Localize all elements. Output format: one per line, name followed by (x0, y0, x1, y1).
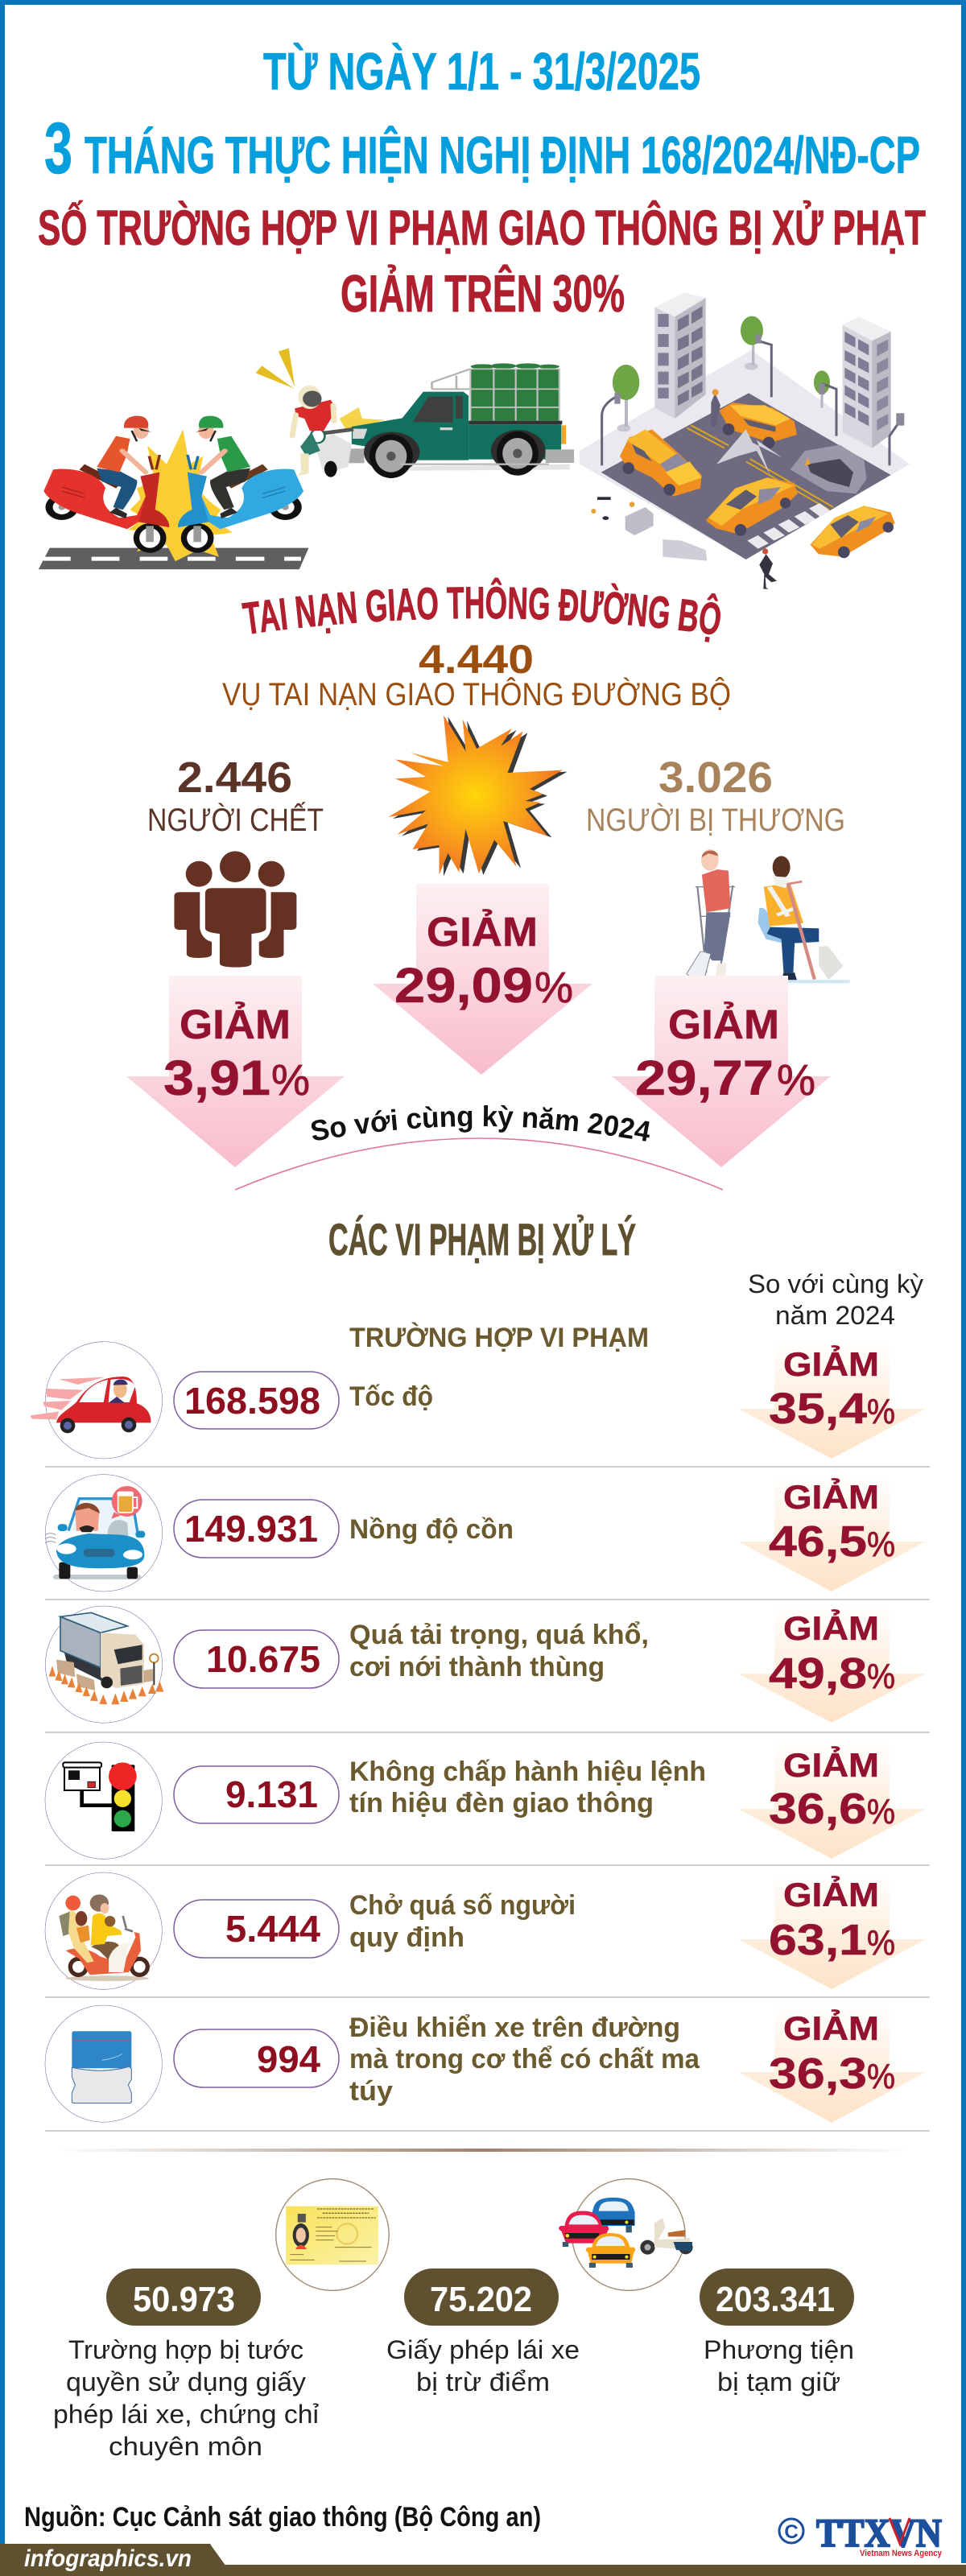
arrow: down percent: 35,4 (769, 1385, 867, 1433)
footer bar (0, 2544, 966, 2576)
stat: licence points deducted (386, 2268, 580, 2396)
stat: injured: NGƯỜI BỊ THƯƠNG (586, 802, 845, 838)
arrow: down percent (738, 2005, 926, 2123)
stat: vehicles impounded: Phương tiện (704, 2335, 854, 2364)
arc under caption (235, 1138, 723, 1190)
stat: deaths (147, 753, 324, 838)
arrow: down percent: % (867, 1923, 895, 1963)
column note: compared with 2024 (748, 1269, 923, 1330)
number pill (174, 1500, 339, 1558)
logo: TTXVN: TTXVN (816, 2510, 942, 2555)
row: alcohol (45, 1475, 926, 1591)
caption: compared with 2024: So với cùng kỳ năm 2024 (311, 1104, 650, 1141)
label: Quá tải trọng, quá khổ, (349, 1620, 649, 1650)
logo: TTXVN (779, 2510, 943, 2558)
label: cơi nới thành thùng (349, 1652, 605, 1682)
icon: drunk driver blue car (45, 1475, 163, 1591)
arrow: down percent: GIẢM (783, 1745, 879, 1784)
arrow: down percent (738, 1606, 926, 1723)
arrow: down percent: GIẢM (783, 1344, 879, 1383)
number pill: 5.444 (225, 1908, 320, 1950)
illustration: truck hitting motorbike (256, 349, 574, 478)
illustration: two scooters colliding (39, 416, 308, 569)
source line: Nguồn: Cục Cảnh sát giao thông (Bộ Công an) (24, 2502, 541, 2533)
label: mà trong cơ thể có chất ma (349, 2044, 700, 2074)
column note: compared with 2024: So với cùng kỳ (748, 1269, 923, 1298)
footer bar: infographics.vn (24, 2545, 192, 2572)
stat: licences revoked (53, 2268, 319, 2461)
column note: compared with 2024: năm 2024 (775, 1301, 895, 1330)
icon: speeding red car (30, 1342, 163, 1459)
label: quy định (349, 1922, 464, 1953)
stat: licences revoked: phép lái xe, chứng chỉ (53, 2400, 319, 2429)
stat: licence points deducted: Giấy phép lái xe (386, 2335, 580, 2364)
arrow: accidents change: GIẢM (427, 908, 538, 955)
stat: total accidents: 4.440 (419, 637, 534, 682)
icon: traffic light with camera (45, 1742, 162, 1859)
icon: impounded vehicles (559, 2179, 693, 2290)
arrow: deaths change: 3,91 (163, 1051, 270, 1105)
column heading: violation cases: TRƯỜNG HỢP VI PHẠM (349, 1323, 649, 1353)
arrow: accidents change: 29,09 (394, 958, 533, 1013)
arrow: down percent: % (867, 1792, 895, 1831)
icon: family on a scooter (45, 1872, 162, 1989)
stat: licences revoked: quyền sử dụng giấy (66, 2368, 306, 2396)
label: tín hiệu đèn giao thông (349, 1788, 654, 1818)
label (349, 1890, 576, 1953)
arrow: deaths change: % (271, 1056, 310, 1104)
label: Chở quá số người (349, 1890, 576, 1921)
label: Điều khiển xe trên đường (349, 2013, 680, 2043)
arrow: down percent: 63,1 (769, 1916, 867, 1964)
arrow: down percent: 49,8 (769, 1649, 867, 1698)
icon: group of people (174, 851, 296, 968)
logo: TTXVN: C (784, 2521, 799, 2543)
stat: total accidents (222, 637, 731, 712)
arrow: injured change: % (777, 1056, 815, 1104)
label (349, 2013, 700, 2107)
arrow: accidents change (373, 884, 592, 1075)
arrow: accidents change: % (535, 964, 573, 1012)
label: túy (349, 2076, 393, 2107)
stat: injured (586, 753, 845, 838)
label: Nồng độ cồn (349, 1514, 514, 1545)
section: road accidents (126, 578, 850, 1191)
arrow: down percent: GIẢM (783, 1875, 879, 1913)
arrow: down percent: 36,6 (769, 1785, 867, 1833)
stat: vehicles impounded: 203.341 (716, 2280, 835, 2319)
label (349, 1620, 649, 1682)
stat: deaths: 2.446 (177, 753, 292, 802)
stat: vehicles impounded: bị tạm giữ (717, 2368, 840, 2396)
stat: injured: 3.026 (658, 753, 773, 802)
title block (38, 42, 926, 323)
label: Không chấp hành hiệu lệnh (349, 1757, 706, 1787)
row: drugs (45, 2005, 926, 2123)
arrow: injured change: 29,77 (635, 1051, 774, 1105)
arrow: down percent: 36,3 (769, 2050, 867, 2098)
row: speeding (30, 1341, 926, 1459)
number pill (174, 1900, 339, 1958)
arrow: down percent: % (867, 2057, 895, 2096)
arrow: down percent (738, 1475, 926, 1591)
arrow: down percent: % (867, 1525, 895, 1564)
icon: injured people with crutches (687, 849, 850, 983)
number pill: 994 (257, 2038, 320, 2080)
arrow: injured change: GIẢM (668, 1001, 779, 1047)
title: numeral 3: 3 (44, 109, 72, 189)
stat: vehicles impounded (700, 2268, 854, 2396)
title: reduction line: GIẢM TRÊN 30% (341, 264, 625, 323)
heading: arched road accidents title: TAI NẠN GIAO THÔNG ĐƯỜNG BỘ (242, 578, 720, 642)
stat: licence points deducted: bị trừ điểm (416, 2368, 550, 2396)
row: overload (45, 1606, 926, 1723)
number pill: 168.598 (184, 1380, 320, 1422)
arrow: down percent: GIẢM (783, 2008, 879, 2047)
section heading: violations handled: CÁC VI PHẠM BỊ XỬ LÝ (328, 1214, 636, 1265)
arrow: down percent: % (867, 1657, 895, 1696)
stat: deaths: NGƯỜI CHẾT (147, 801, 324, 838)
stat: licences revoked: chuyên môn (109, 2432, 262, 2461)
arrow: down percent: GIẢM (783, 1608, 879, 1647)
stat: licence points deducted: 75.202 (430, 2280, 532, 2319)
icon: drug bag (45, 2005, 162, 2122)
illustration: isometric city crash scene (580, 292, 910, 589)
arrow: down percent: GIẢM (783, 1477, 879, 1516)
number pill: 10.675 (206, 1638, 320, 1680)
logo: TTXVN: Vietnam News Agency (860, 2549, 943, 2558)
number pill (174, 1372, 339, 1429)
icon: overloaded truck with cones (45, 1606, 163, 1723)
number pill (174, 2029, 339, 2087)
arrow: down percent (738, 1341, 926, 1459)
row: too many passengers (45, 1872, 926, 1989)
number pill: 9.131 (225, 1773, 318, 1815)
icon: driving licence card (276, 2179, 389, 2290)
arrow: deaths change: GIẢM (180, 1001, 291, 1047)
arrow: deaths change (126, 976, 345, 1167)
arrow: down percent: % (867, 1392, 895, 1431)
number pill (174, 1766, 339, 1823)
label: Tốc độ (349, 1381, 433, 1412)
stat: licences revoked: Trường hợp bị tước (68, 2335, 303, 2364)
number pill (174, 1630, 339, 1688)
arrow: down percent: 46,5 (769, 1517, 867, 1566)
row: traffic light (45, 1741, 926, 1859)
stat: total accidents: VỤ TAI NẠN GIAO THÔNG ĐƯỜNG BỘ (222, 676, 731, 712)
stat: licences revoked: 50.973 (133, 2280, 235, 2319)
arrow: down percent (738, 1741, 926, 1859)
icon: explosion (388, 715, 568, 877)
arrow: injured change (612, 976, 831, 1167)
title: date range: TỪ NGÀY 1/1 - 31/3/2025 (263, 42, 700, 101)
arrow: down percent (738, 1872, 926, 1989)
number pill: 149.931 (184, 1508, 318, 1550)
label (349, 1757, 706, 1818)
